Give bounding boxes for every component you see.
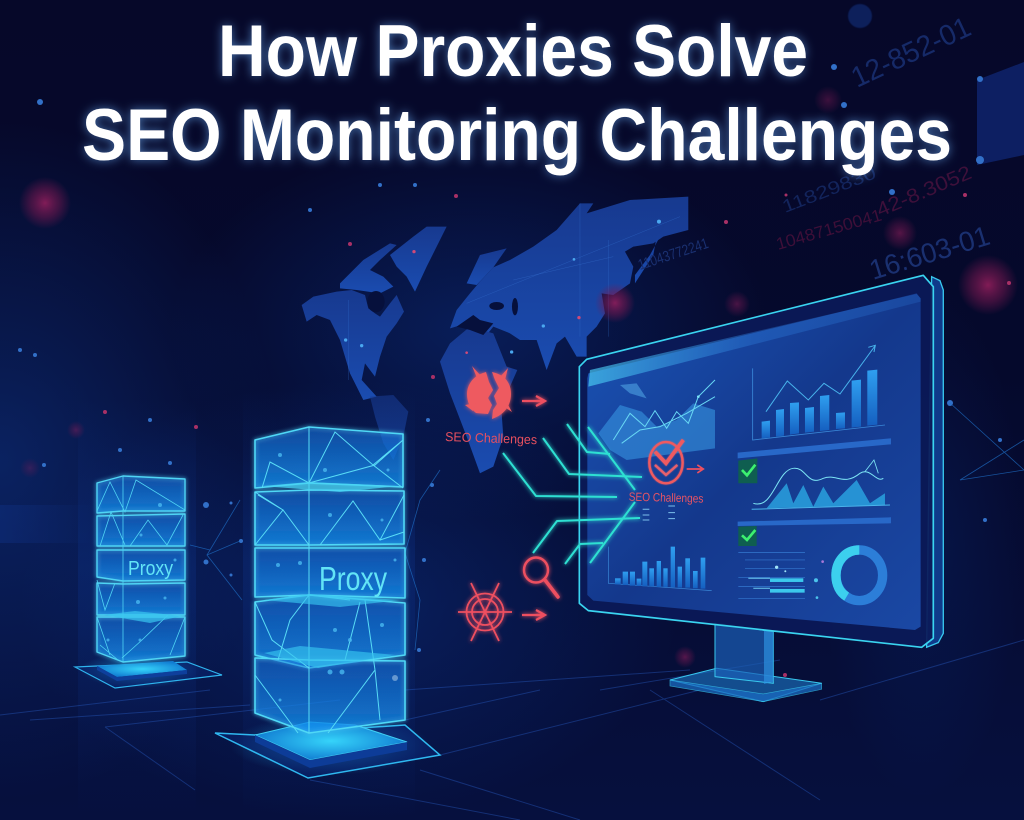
cyan connector lines (503, 424, 642, 564)
monitor frame (579, 275, 933, 647)
red icon: broken globe (465, 366, 512, 419)
tower center edge and mesh lines (255, 427, 404, 733)
background data numbers: 42-8.3052 (873, 162, 975, 222)
large proxy tower (215, 427, 440, 778)
tower floor frame (75, 652, 222, 688)
red arrow 1 (522, 396, 545, 406)
label: seo challenges screen: SEO Challenges (629, 490, 704, 506)
red icon: crosshair wheel (458, 583, 512, 641)
small proxy tower (75, 476, 222, 688)
monitor screen (587, 293, 921, 630)
check box 2 (738, 526, 757, 546)
divider band 2 (738, 517, 891, 526)
japan (635, 220, 667, 283)
background data numbers: 10487150041 (774, 206, 884, 254)
chart: bottom lines (738, 553, 824, 599)
chart: donut (836, 550, 883, 601)
network constellation lines (190, 403, 1024, 650)
chart: area peaks (752, 460, 890, 509)
label: proxy small: Proxy (128, 558, 173, 580)
map inland dark seas (367, 291, 518, 335)
tower floor (215, 715, 440, 778)
background data numbers: 12-852-01 (846, 11, 976, 94)
north america (302, 290, 404, 400)
background grid lines (0, 640, 1024, 820)
tower segments (255, 427, 405, 733)
eurasia (450, 197, 688, 370)
red arrow 2 (522, 610, 545, 620)
title (82, 11, 952, 176)
screen red arrow (687, 465, 703, 473)
tower center edge and mesh lines (97, 476, 185, 662)
scandinavia (467, 248, 507, 285)
title line 2: SEO Monitoring Challenges (82, 95, 952, 176)
monitor (579, 275, 943, 702)
background data numbers (636, 11, 993, 286)
background data numbers: 11043772241 (636, 235, 711, 274)
south america (370, 395, 408, 460)
background dots (18, 64, 1011, 677)
divider band 1 (738, 438, 891, 458)
check box 1 (738, 458, 757, 483)
tower light plates (262, 482, 400, 492)
tower particle dots (276, 453, 398, 702)
chart: top right bars (753, 345, 885, 440)
world map (302, 197, 688, 473)
chart: bottom left bars (608, 547, 712, 591)
title line 1: How Proxies Solve (218, 11, 808, 92)
map grid and light dots (344, 203, 680, 380)
monitor stand (670, 623, 822, 702)
map red hotspot (595, 283, 635, 323)
red icon: magnifier (524, 558, 558, 597)
background red glow spots (19, 4, 1018, 668)
small table rows (643, 506, 675, 520)
screen check icon (649, 440, 683, 483)
background data numbers: 11829830 (779, 163, 879, 217)
tower particle dots (106, 503, 176, 642)
label: seo challenges map: SEO Challenges (445, 429, 538, 447)
greenland (390, 227, 447, 292)
monitor back edge (927, 277, 943, 647)
label: proxy large: Proxy (319, 560, 387, 597)
chart: top left area (598, 380, 715, 460)
arctic islands (340, 243, 397, 293)
background data numbers: 16:603-01 (866, 220, 993, 286)
screen top band (588, 294, 921, 387)
tower light plates (104, 611, 182, 623)
tower segments (97, 476, 185, 662)
africa (440, 327, 517, 473)
